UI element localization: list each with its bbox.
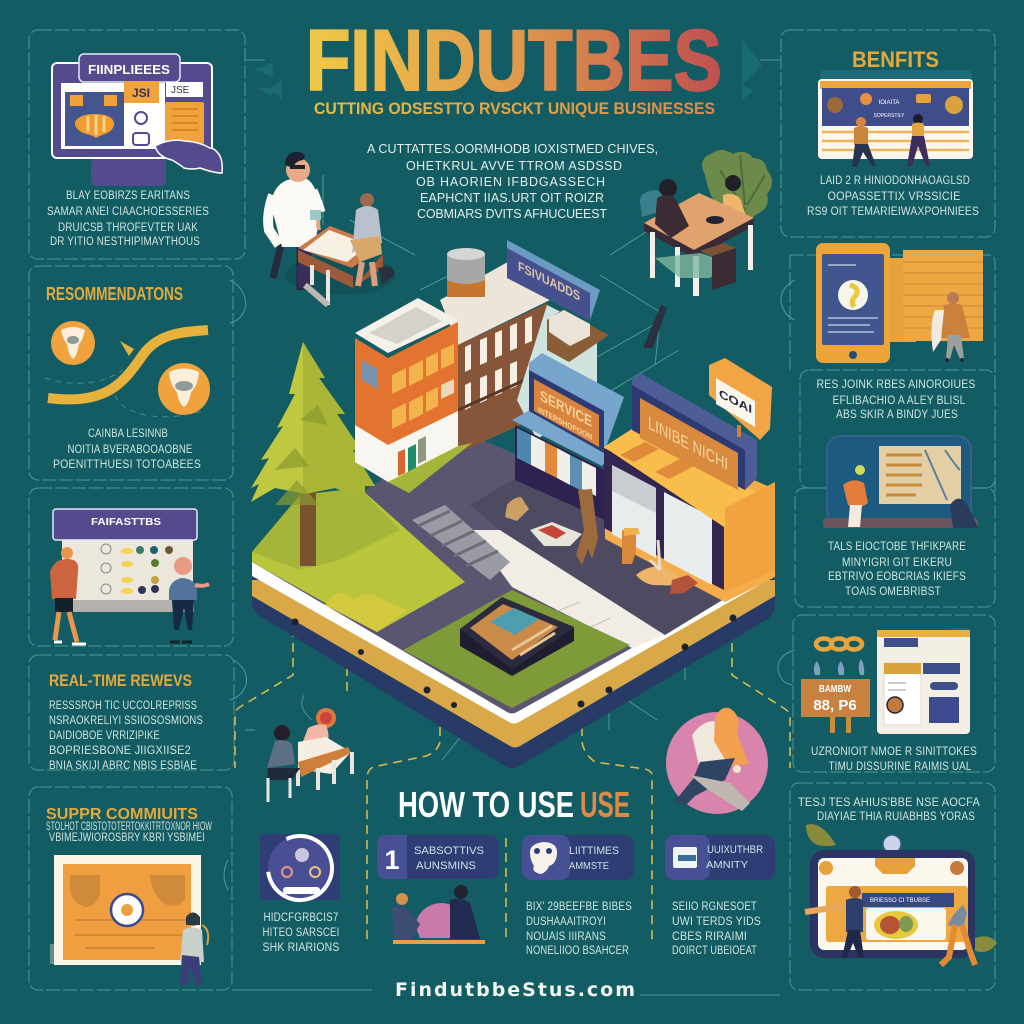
people <box>843 465 978 528</box>
stairs <box>412 505 510 580</box>
step text: HIDCFGRBCIS7 <box>264 912 338 924</box>
panel text: BNIA SKIJI ABRC NBIS ESBIAE <box>49 760 197 772</box>
people <box>852 114 930 167</box>
illustration: pink circle <box>666 708 768 814</box>
price sign: 88, P6 <box>813 697 857 714</box>
heading: HOW TO USE <box>398 784 574 825</box>
website card <box>818 70 973 159</box>
person <box>180 912 208 985</box>
tank <box>447 248 485 297</box>
panel: recommendations <box>29 266 233 480</box>
brown building <box>440 255 550 453</box>
intro text: EAPHCNT IIAS.URT OIT ROIZR <box>420 191 604 205</box>
title: FINDUTBES <box>306 13 722 109</box>
monitor illustration: JSE <box>171 85 190 96</box>
page card <box>877 628 970 734</box>
panel text: BLAY EOBIRZS EARITANS <box>66 190 190 202</box>
step: 2: AMMSTE <box>569 861 609 872</box>
panel: mobile app <box>790 243 995 502</box>
chain icon <box>816 638 862 650</box>
sign: unique: LINIBE NICHI <box>648 413 728 474</box>
person <box>931 292 970 362</box>
panel: benefits <box>781 30 995 237</box>
monitor illustration: JSI <box>132 86 150 100</box>
step: 3: UUIXUTHBR <box>707 844 763 856</box>
panel: features board <box>29 488 233 646</box>
person: right <box>169 557 209 642</box>
store 1 <box>512 353 624 520</box>
sign: top <box>507 240 600 321</box>
sign: unique <box>632 373 757 490</box>
panel: how to use <box>256 784 775 957</box>
illustration: person at bench <box>267 695 352 802</box>
terminal dots <box>292 614 736 708</box>
subtitle: CUTTING ODSESTTO RVSCKT UNIQUE BUSINESSES <box>314 99 715 118</box>
shop plaza <box>470 470 775 635</box>
lawn <box>403 590 630 708</box>
panel: platform listing <box>29 30 245 259</box>
price sign <box>801 659 870 733</box>
panel: tablet testimonial <box>790 783 997 990</box>
panel text: UZRONIOIT NMOE R SINITTOKES <box>811 746 977 758</box>
banner <box>53 509 197 540</box>
panel text: DAIDIOBOE VRRIZIPIKE <box>49 730 160 742</box>
icon: top circle <box>51 321 95 365</box>
step: 2: LIITTIMES <box>569 845 619 857</box>
panel text <box>53 428 201 471</box>
step: 1 <box>377 835 499 944</box>
tablet: BRIESSO CI TBUBSE <box>870 898 930 904</box>
illustration: man at table <box>268 152 395 305</box>
panel text: BOPRIESBONE JIIGXIISE2 <box>49 745 191 757</box>
illustration: couple at desk <box>640 150 772 296</box>
panel: real-time reviews <box>29 655 234 772</box>
orange board <box>50 855 201 965</box>
step: 1: 1 <box>384 845 400 875</box>
step: 1: AUNSMINS <box>416 860 476 872</box>
panel text <box>798 797 980 823</box>
step: icon <box>256 824 344 954</box>
tree <box>251 342 375 566</box>
sign: top: FSIVUADDS <box>518 259 580 304</box>
panel text: NOITIA BVERABOOAOBNE <box>68 444 193 456</box>
panel text: TESJ TES AHIUS'BBE NSE AOCFA <box>798 797 980 809</box>
panel text: RESSSROH TIC UCCOLREPRISS <box>49 700 197 712</box>
grass slope <box>252 488 465 632</box>
step text: DOIRCT UBEIOEAT <box>672 945 757 957</box>
step: 1: SABSOTTIVS <box>414 845 484 857</box>
panel text: RS9 OIT TEMARIEIWAXPOHNIEES <box>807 206 979 218</box>
decorative triangles <box>255 40 762 100</box>
panel text: RES JOINK RBES AINOROIUES <box>816 379 976 391</box>
footer url: FindutbbeStus.com <box>395 979 635 1001</box>
step text: HITEO SARSCEI <box>262 927 340 939</box>
step text: BIX' 29BEEFBE BIBES <box>526 901 632 913</box>
panel text: NSRAOKRELIYI SSIIOSOSMIONS <box>49 715 203 727</box>
document <box>886 250 983 342</box>
suitcase <box>460 597 574 676</box>
heading: BENFITS <box>852 47 939 72</box>
icon: lower circle <box>158 363 210 415</box>
panel text: TOAIS OMEBRIBST <box>845 586 941 598</box>
panel text: EFLIBACHIO A ALEY BLISL <box>832 395 966 407</box>
panel text: CAINBA LESINNB <box>88 428 168 440</box>
sub text <box>46 821 212 844</box>
base platform <box>252 430 775 768</box>
step text: SHK RIARIONS <box>262 942 340 954</box>
sign: hanging: COAI <box>719 387 752 416</box>
step text: DUSHAAAITROYI <box>526 916 606 928</box>
curve arrow <box>45 330 208 417</box>
panel text: LAID 2 R HINIODONHAOAGLSD <box>820 175 970 187</box>
step: 3: AMNITY <box>706 859 748 871</box>
central isometric scene <box>251 240 775 768</box>
panel: pricing <box>793 615 995 773</box>
panel text: DRUICSB THROFEVTER UAK <box>58 222 198 234</box>
panel text: OOPASSETTIX VRSSICIE <box>828 191 961 203</box>
step text: UWI TERDS YIDS <box>672 916 761 928</box>
person: left <box>50 547 86 644</box>
panel: support communities <box>29 787 232 990</box>
step: 2 <box>522 835 634 957</box>
panel text: EBTRIVO EOBCRIAS IKIEFS <box>828 571 966 583</box>
panel text: ABS SKIR A BINDY JUES <box>836 409 958 421</box>
step: 3 <box>665 835 775 957</box>
tablet <box>806 824 975 958</box>
screen <box>823 436 978 528</box>
panel: map screen <box>795 436 995 607</box>
sign: hanging <box>709 358 772 440</box>
panel text <box>47 190 209 248</box>
people <box>805 886 975 965</box>
heading: USE <box>580 784 630 825</box>
store 2 <box>604 429 775 602</box>
sub text: VBIMEJWIOROSBRY KBRI YSBIMEI <box>49 832 205 844</box>
store 1: SERVICE <box>540 388 592 431</box>
price sign: BAMBW <box>819 684 851 695</box>
heading: SUPPR COMMIUITS <box>46 806 198 823</box>
step text <box>526 901 632 957</box>
step text: NOUAIS IIIRANS <box>526 931 606 943</box>
panel text: DIAYIAE THIA RUIABHBS YORAS <box>817 811 975 823</box>
step text: NONELIIOO BSAHCER <box>526 945 629 957</box>
sub text: STOLHOT CBISTOTOTERTOKKITRTOXNOR HIOW <box>46 821 212 833</box>
step text <box>672 901 761 957</box>
website card: IOIAITA <box>879 100 899 106</box>
panel text: DR YITIO NESTHIPIMAYTHOUS <box>50 236 200 248</box>
heading: RESOMMENDATONS <box>46 284 183 304</box>
panel text: TIMU DISSURINE RAIMIS UAL <box>828 761 972 773</box>
shelf <box>547 310 609 362</box>
wall behind storefronts <box>517 305 597 440</box>
step text <box>262 912 340 954</box>
monitor illustration: FIINPLIEEES <box>88 63 170 77</box>
intro text: A CUTTATTES.OORMHODB IOXISTMED CHIVES, <box>367 142 658 156</box>
panel text <box>811 746 977 773</box>
heading: REAL-TIME REWEVS <box>49 671 192 690</box>
orange building <box>355 298 472 493</box>
illustration <box>392 885 485 944</box>
store 1: INTERSHOPOON <box>538 404 592 442</box>
panel text <box>49 700 203 772</box>
panel text <box>816 379 976 421</box>
connector lines <box>224 60 795 995</box>
intro text: OB HAORIEN IFBDGASSECH <box>416 175 605 189</box>
panel text <box>828 541 966 598</box>
intro text: COBMIARS DVITS AFHUCUEEST <box>417 207 607 221</box>
panel text: TALS EIOCTOBE THFIKPARE <box>828 541 966 553</box>
chart board <box>62 540 194 612</box>
intro text: OHETKRUL AVVE TTROM ASDSSD <box>406 159 622 173</box>
panel text: POENITTHUESI TOTOABEES <box>53 459 201 471</box>
phone <box>816 243 890 363</box>
intro text <box>367 142 658 221</box>
panel text <box>807 175 979 218</box>
panel text: SAMAR ANEI CIAACHOESSERIES <box>47 206 209 218</box>
white path <box>470 530 665 648</box>
monitor illustration <box>52 54 222 186</box>
website card: SOPERSTILY <box>873 113 905 119</box>
panel text: MINYIGRI GIT EIKERU <box>842 557 952 569</box>
plaza items <box>505 489 698 594</box>
step text: SEIIO RGNESOET <box>672 901 757 913</box>
banner: FAIFASTTBS <box>91 516 161 528</box>
step text: CBES RIRAIMI <box>672 931 747 943</box>
